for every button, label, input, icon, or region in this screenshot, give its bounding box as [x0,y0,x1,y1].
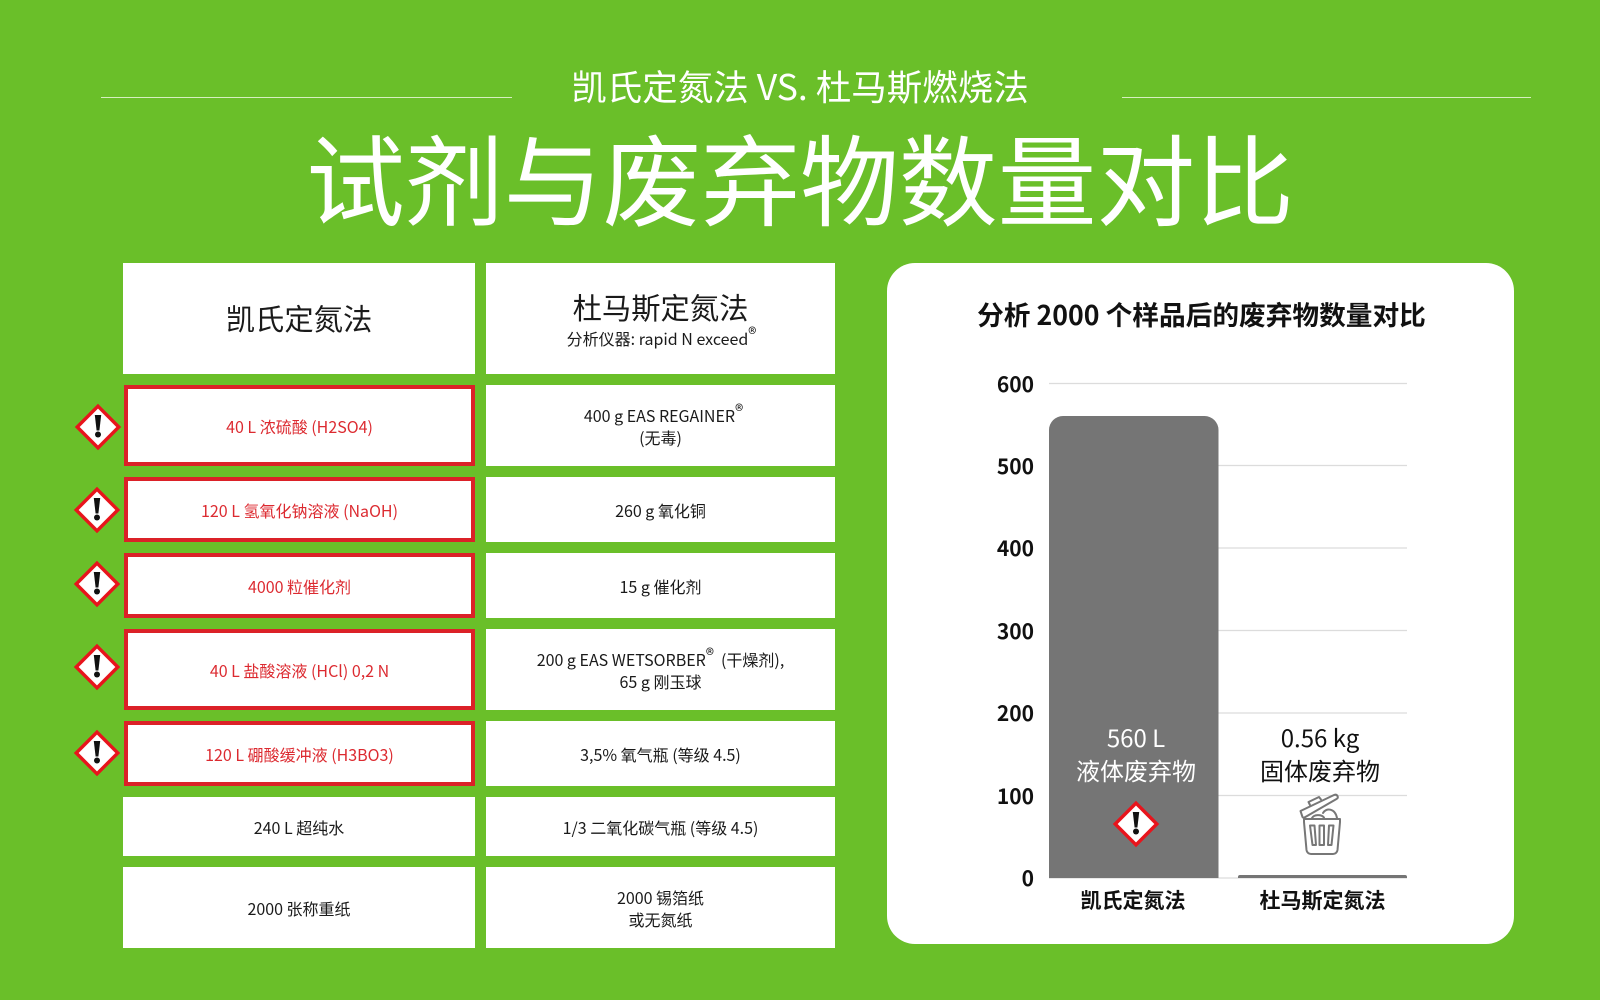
row 3 left: 4000 粒催化剂 [248,574,351,598]
row 5 left [124,721,475,786]
row 3 right [486,553,835,618]
panel: waste chart [887,263,1514,944]
row 7 left [123,867,475,948]
header rule left [101,97,512,98]
column header: Kjeldahl: 凯氏定氮法 [226,296,372,338]
row 6 right [486,797,835,856]
header rule right [1122,97,1531,98]
bar label: Dumas waste [1260,719,1380,787]
row 2 left: 120 L 氢氧化钠溶液 (NaOH) [201,498,398,522]
x axis label: Kjeldahl: 凯氏定氮法 [1080,885,1186,915]
column header: Dumas: 杜马斯定氮法 [573,286,748,328]
row 6 left: 240 L 超纯水 [254,814,344,838]
row 5 right [486,721,835,786]
text: 0 [1022,863,1034,893]
text: 100 [997,781,1034,811]
row 1 right: (无毒) [639,424,682,448]
bar label: Kjeldahl waste: 液体废弃物 [1076,752,1196,787]
text: 600 [997,369,1034,399]
row 1 left [124,385,475,466]
column header: Kjeldahl [123,263,475,374]
row 2 left [124,477,475,542]
row 4 left: 40 L 盐酸溶液 (HCl) 0,2 N [210,658,389,682]
row 4 left [124,629,475,710]
icon: hazard row 4 [74,644,120,690]
row 4 right [486,629,835,710]
icon: hazard row 2 [74,486,120,534]
row 7 right: 2000 锡箔纸 [617,884,704,908]
subtitle: 凯氏定氮法 VS. 杜马斯燃烧法 [571,60,1029,111]
bar label: Dumas waste: 固体废弃物 [1260,752,1380,787]
icon: hazard row 5 [74,730,120,776]
row 2 right [486,477,835,542]
row 7 left: 2000 张称重纸 [247,896,351,920]
bar label: Kjeldahl waste [1076,719,1196,787]
text: 400 [997,533,1034,563]
row 1 right: 400 g EAS REGAINER® [584,396,743,426]
text: 300 [997,616,1034,646]
column header: Dumas [486,263,835,374]
icon: hazard in bar [1112,800,1160,848]
row 2 right: 260 g 氧化铜 [615,498,706,522]
column header: Dumas: 分析仪器: rapid N exceed® [567,320,756,350]
bar chart gridlines and bars [1049,382,1407,879]
row 4 right: 200 g EAS WETSORBER® (干燥剂), [537,640,784,670]
bar label: Dumas waste: 0.56 kg [1281,719,1359,754]
chart title: 分析 2000 个样品后的废弃物数量对比 [977,294,1426,333]
row 3 right: 15 g 催化剂 [620,574,701,598]
row 3 left [124,553,475,618]
title: 试剂与废弃物数量对比 [306,104,1294,247]
row 6 left [123,797,475,856]
x axis label: Dumas: 杜马斯定氮法 [1260,885,1386,915]
row 1 right [486,385,835,466]
row 1 left: 40 L 浓硫酸 (H2SO4) [226,414,373,438]
icon: hazard row 1 [74,404,122,450]
row 5 right: 3,5% 氧气瓶 (等级 4.5) [580,742,741,766]
row 5 left: 120 L 硼酸缓冲液 (H3BO3) [205,742,394,766]
text: 500 [997,451,1034,481]
row 4 right: 65 g 刚玉球 [620,668,701,692]
row 7 right [486,867,835,948]
row 7 right: 或无氮纸 [628,906,692,930]
text: 200 [997,698,1034,728]
y axis labels [997,369,1034,893]
row 6 right: 1/3 二氧化碳气瓶 (等级 4.5) [563,814,758,838]
icon: hazard row 3 [74,560,120,608]
icon: trash bin [1300,794,1341,855]
bar label: Kjeldahl waste: 560 L [1107,719,1165,754]
